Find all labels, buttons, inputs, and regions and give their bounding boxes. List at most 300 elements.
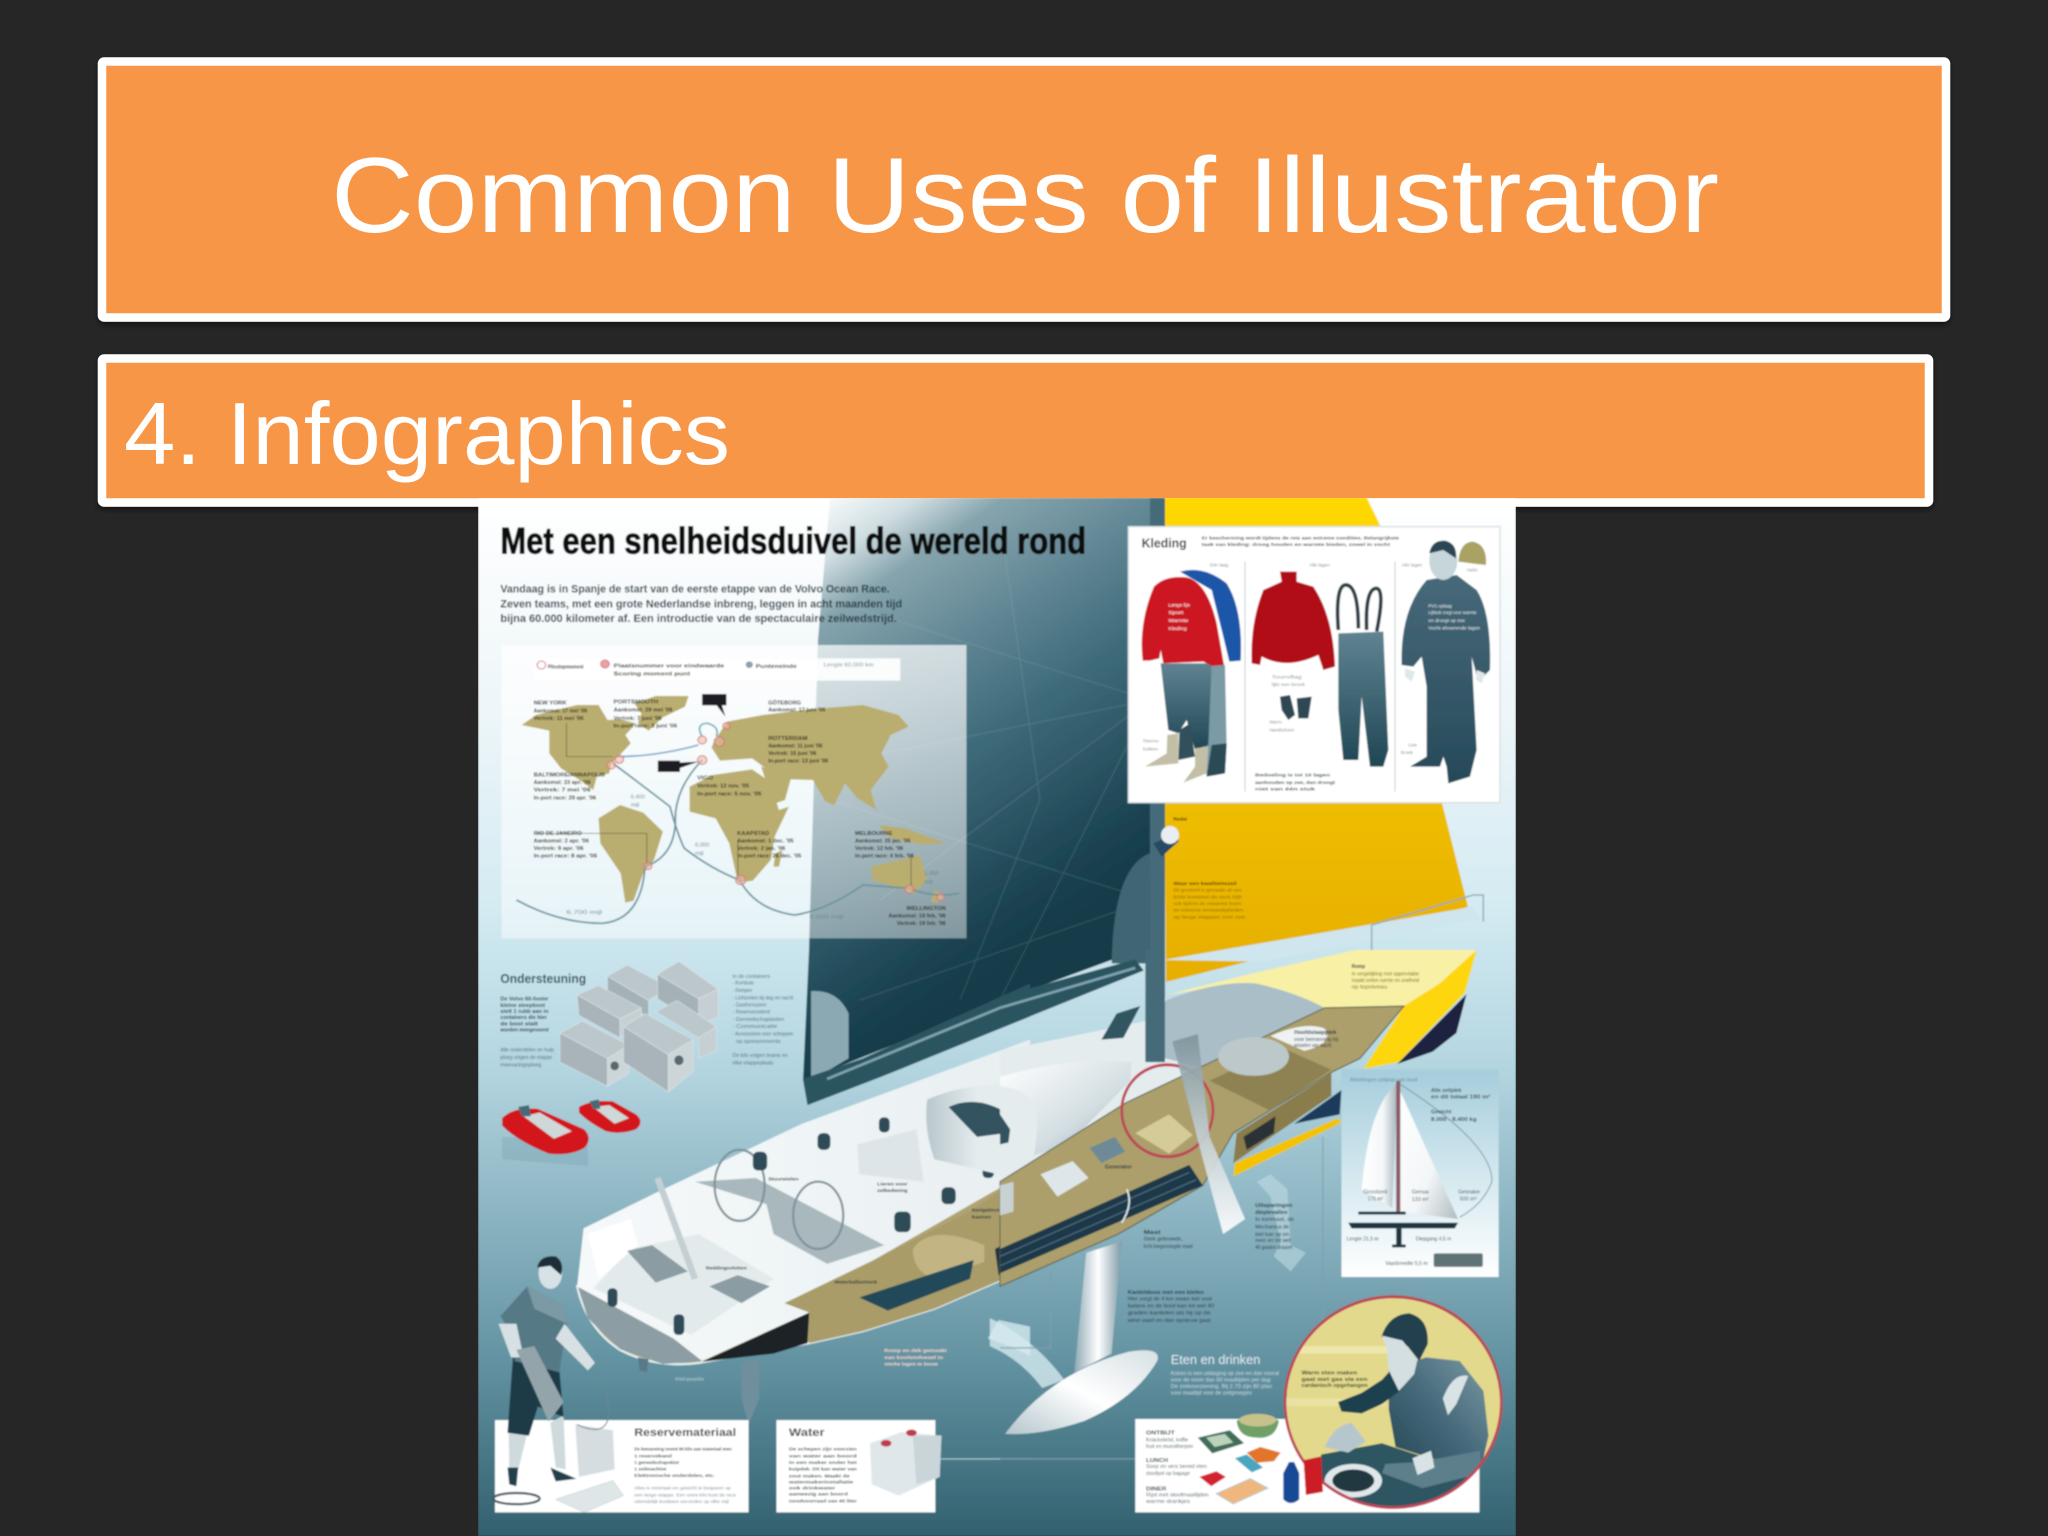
boom (803, 984, 1030, 1105)
lower-right region drawn at zoom scale (990, 950, 1501, 1512)
food intro: Koken is een uitdaging op zee en dan vooral (1171, 1371, 1279, 1377)
water text: zout maken. Maakt de (789, 1473, 850, 1479)
map city labels: WELLINGTON (906, 906, 946, 912)
clothing panel region drawn at zoom scale (1112, 527, 1500, 963)
inset labels: Gennaker (1458, 1189, 1480, 1196)
hatch (1101, 1006, 1140, 1040)
bus icon (1434, 1253, 1483, 1267)
boat notes: neer en tot wel (1255, 1238, 1291, 1244)
radar dome (1153, 817, 1188, 857)
spare materials text: een lange etappe. Een extra kilo kost de race (634, 1492, 736, 1498)
deck labels: Waterballasttank (834, 1279, 878, 1285)
meal labels: fruit en muesliherpen (1146, 1444, 1194, 1450)
connector lines (1000, 1137, 1323, 1459)
hull dark bunks (1000, 1165, 1203, 1273)
deck labels: Lieren voor (877, 1181, 908, 1187)
boat notes: voor bemanning bij (1294, 1037, 1338, 1043)
khaki interior (1000, 1006, 1404, 1286)
big curved arrow head (988, 1320, 1030, 1355)
mast top (1396, 1081, 1400, 1212)
clothing caption: niet van één stuk (1255, 787, 1315, 793)
support list: - Rompen (732, 988, 752, 994)
khaki hull interior (784, 1170, 1030, 1343)
route distance notes: mijl (631, 803, 639, 809)
mast base (1145, 950, 1165, 1062)
inset labels: 175 m² (1368, 1196, 1383, 1202)
forward compartment disk (1210, 1026, 1331, 1111)
mainsail (1362, 1083, 1397, 1208)
water text: ook drinkwater (789, 1486, 836, 1492)
stern side panel (588, 1219, 638, 1279)
map city labels: Aankomst: 29 mei '06 (614, 708, 673, 714)
map city labels: In-port race: 13 juni '06 (768, 759, 829, 765)
map legend: Pitsstopmoment (548, 664, 584, 670)
curved arrow body (990, 1318, 1064, 1388)
map city labels: In-port race: 5 nov. '05 (697, 792, 762, 798)
map city labels: Vertrek: 12 feb. '06 (855, 846, 904, 852)
food intro: De zeilvoorziening. Bij 2.70 zijn 80 plan (1171, 1384, 1272, 1390)
cabin top (1000, 1061, 1132, 1156)
mast-side arch (1112, 853, 1151, 963)
spare materials text (634, 1447, 736, 1505)
support list: - Accessoires voor schoppen (732, 1031, 793, 1038)
support text: De Volvo 60-footer (500, 996, 549, 1002)
layer labels (1210, 563, 1478, 573)
map city labels: In-port race: 8 apr. '06 (534, 854, 598, 860)
portrait caption (1302, 1370, 1367, 1389)
boat notes: 40 graden draaien (1255, 1245, 1293, 1251)
inset labels: Grootzeil (1363, 1189, 1387, 1196)
spare materials text: Alles is minimaal om gewicht te besparen op (634, 1486, 731, 1492)
interior dark panels (859, 1230, 1030, 1311)
boat notes: graden kantelen als hij op de (1128, 1310, 1211, 1316)
survival suit figure: Lies (1408, 743, 1418, 748)
intro paragraph: bijna 60.000 kilometer af. Een introductie van de spectaculaire zeilwedstrijd. (500, 613, 897, 625)
route distance notes: 5.500 mijl (809, 914, 843, 920)
rail outline (1372, 895, 1483, 953)
map city labels: Vertrek: 7 mei '06 (534, 788, 592, 794)
map city labels: Aankomst: 25 jan. '06 (855, 838, 911, 844)
equipment boxes (1000, 1114, 1193, 1215)
clothing caption: Handschoen (1269, 728, 1295, 733)
clothing intro: taak van kleding: droog houden en warmte bieden, zowel in vocht (1202, 542, 1390, 548)
water text: noodvoorraad van 40 liter (789, 1498, 857, 1504)
survival suit figure: en droogt op zee (1428, 618, 1466, 623)
helm wheels (715, 1150, 843, 1249)
map city labels: Vertrek: 12 nov. '05 (697, 784, 750, 790)
black hull section (702, 1312, 809, 1362)
deck labels: kamer (972, 1214, 992, 1220)
map legend: Lengte 60.000 km (824, 663, 874, 669)
food bowl (1237, 1414, 1279, 1438)
food packets (1198, 1430, 1281, 1504)
clothing caption: Bedoeling is tot 10 lagen (1255, 773, 1330, 779)
water text: van water aan boord (789, 1453, 857, 1460)
base layer: shirts and legs: Sport (1168, 610, 1184, 615)
survival suit figure: Vocht afvoerende lagen (1428, 625, 1481, 630)
support text: kleine sleepboot (500, 1003, 545, 1009)
support list: - Gereedschapkisten (732, 1017, 784, 1023)
helmet (1458, 542, 1486, 565)
base layer: shirts and legs: Warmte (1168, 618, 1189, 623)
poster background (478, 498, 1516, 1536)
water text: De schepen zijn voorzien (789, 1447, 857, 1453)
yellow sail (1162, 498, 1468, 982)
support text: de boot stalt (500, 1021, 538, 1028)
inset labels: 133 m² (1412, 1197, 1429, 1203)
base layer: shirts and legs: Lange lijn (1168, 603, 1190, 608)
spare materials text: 1 reserveband (634, 1453, 672, 1460)
red highlight circle (1122, 1065, 1213, 1157)
support text (499, 996, 554, 1069)
boat notes: Mast (1144, 1230, 1161, 1236)
inset labels: Afmetingen zeilplan van boot (1350, 1077, 1418, 1084)
white deck (577, 1040, 1030, 1361)
title banner (102, 62, 1946, 318)
continents (522, 696, 947, 903)
support list: - Kombuis (732, 981, 754, 987)
inset labels: 8.000 - 8.400 kg (1431, 1117, 1477, 1123)
clothing heading: Kleding (1142, 536, 1187, 550)
boat notes: wind vaart en dan opnieuw gaat (1128, 1318, 1211, 1324)
trousers with braces (1338, 585, 1388, 767)
meal labels: Soep en vers bereid eten (1146, 1464, 1207, 1470)
food heading: Eten en drinken (1171, 1353, 1260, 1367)
map city labels: ROTTERDAM (768, 736, 808, 742)
support list: - Reserveonderd (732, 1009, 770, 1016)
sail note: ook tijdens de zwaarste buien (1173, 901, 1242, 906)
callout tags (658, 694, 726, 772)
sail note: en extreme omstandigheden (1173, 908, 1244, 913)
deck labels (675, 1176, 1013, 1383)
panel: sail plan inset (1341, 1070, 1499, 1277)
map city labels: MELBOURNE (855, 831, 893, 837)
support list: elke etappeplaats (732, 1060, 774, 1066)
deck labels: Stuurwielen (768, 1176, 799, 1183)
inset labels: Gewicht (1431, 1109, 1452, 1116)
map city labels: In-port race: 4 feb. '06 (855, 854, 915, 860)
red can overlap (1304, 1456, 1323, 1495)
map city labels: BALTIMORE/ANNAPOLIS (534, 773, 605, 779)
support text: stelt 1 rubb aan in (500, 1009, 549, 1015)
map city labels: Vertrek: 19 feb. '06 (897, 921, 946, 927)
inset labels: Diepgang 4,5 m (1416, 1237, 1451, 1243)
map city labels: RIO DE JANEIRO (534, 831, 582, 837)
map legend: Punteneinde (756, 664, 798, 670)
boat notes: Kanteldoos met een kielen (1128, 1290, 1204, 1296)
water text: kuipdek. Dit kan water van (789, 1466, 857, 1473)
rudder stub (741, 1359, 759, 1425)
crew member figure (499, 1256, 609, 1486)
side wall (857, 1129, 924, 1182)
carbon note: sterke lagen te bouw (884, 1361, 938, 1368)
map city labels: Vertrek: 7 juni '06 (614, 716, 663, 722)
boat notes (1105, 964, 1419, 1324)
spare materials text: 1 zeilmachine (634, 1466, 667, 1473)
boat notes: dieptevallen (1255, 1210, 1287, 1216)
layer labels: Alle lagen (1309, 563, 1330, 568)
clothing caption: aanhouden op zee, dan droogt (1255, 780, 1335, 786)
carbon note (884, 1348, 947, 1368)
map city labels: Vertrek: 2 jan. '06 (737, 846, 786, 852)
food intro (1171, 1371, 1279, 1397)
interior ring (913, 1235, 984, 1279)
fleece jacket (1251, 572, 1335, 670)
map city labels: Aankomst: 1 dec. '05 (737, 838, 794, 844)
map legend: Plaatsnummer voor eindwaarde (614, 663, 725, 669)
layer labels: Alle lagen (1402, 563, 1423, 568)
carbon note: van koolstofvezel in (884, 1355, 943, 1361)
map city labels: PORTSMOUTH (614, 699, 658, 705)
deck labels: Navigatiecentrum (972, 1207, 1013, 1214)
mast foot arch (811, 991, 849, 1081)
water text: watermakerinstallatie (788, 1480, 854, 1486)
boat notes: balans en de boot kan tot wel 40 (1128, 1303, 1214, 1310)
hull silhouette (1348, 1212, 1458, 1247)
boat notes: wisselen van wacht (1294, 1043, 1332, 1049)
support heading: Ondersteuning (500, 972, 586, 986)
sail note: Dit grootzeil is gemaakt uit een (1173, 888, 1242, 893)
route distance notes: 6.400 (631, 794, 645, 800)
side arrow (1257, 1174, 1306, 1271)
carbon note: Romp en dek gemaakt (884, 1348, 947, 1354)
clothing caption: Warm (1269, 719, 1282, 724)
boat notes: Mechanica de (1255, 1224, 1289, 1230)
support list: De kits volgen teams en (732, 1053, 788, 1059)
meal labels: stoofpot op bagage (1146, 1471, 1190, 1477)
drinks (1283, 1456, 1323, 1503)
portrait caption: gaat met gas via een (1302, 1377, 1367, 1383)
base layer: shirts and legs (1142, 570, 1241, 783)
lower-left region drawn at zoom scale (493, 961, 1030, 1512)
boat notes: Generator (1105, 1164, 1132, 1171)
support list: op sponsorevents (736, 1039, 781, 1045)
survival suit figure (1401, 541, 1490, 783)
meal labels: warme drankjes (1146, 1499, 1191, 1505)
deck labels: Kiel-positie (675, 1376, 704, 1383)
food intro: voor de meer dan 80 maaltijden per dag (1171, 1377, 1271, 1384)
winches (607, 1117, 994, 1335)
clothing caption (1255, 674, 1335, 793)
cabin hatch dark (1000, 1114, 1010, 1144)
spare materials text: uiteindelijk kostbare seconden op elke mijl (634, 1499, 729, 1505)
intro paragraph: Zeven teams, met een grote Nederlandse inbreng, leggen in acht maanden tijd (500, 599, 902, 610)
sail note: lichte kunststof die sterk blijft (1173, 894, 1242, 899)
daggerboard (1172, 1034, 1245, 1234)
map city labels: GÖTEBORG (768, 700, 801, 706)
map city labels: NEW YORK (534, 700, 568, 706)
cockpit sides (695, 1178, 884, 1264)
support text: containers die hier (500, 1015, 547, 1021)
black bow (1397, 994, 1467, 1064)
connector line to food panel (941, 1457, 1030, 1460)
boat notes: licht toegevoegde mast (1144, 1244, 1193, 1250)
meal labels: Rijst met stoofmaaltijden (1146, 1493, 1209, 1499)
water text (788, 1447, 857, 1504)
spare materials text: De bemanning neemt 80 kilo aan materiaal mee: (634, 1447, 733, 1453)
boat notes: Sterk gebouwde, (1144, 1237, 1183, 1243)
base layer: shirts and legs: Thermo (1143, 739, 1159, 744)
pale yellow bow deck (1166, 950, 1477, 1068)
subtitle text: 4. Infographics (124, 384, 730, 483)
route distance notes: 6.000 (695, 843, 709, 849)
spare materials heading: Reservemateriaal (634, 1427, 736, 1439)
rigid inflatable boats (502, 1099, 641, 1166)
circular portrait: crew eating (1284, 1297, 1501, 1511)
boat notes: In kielmast, de (1255, 1217, 1294, 1223)
grey stern (578, 1287, 702, 1364)
meal labels: Knäckebröd, koffie (1146, 1437, 1189, 1443)
boat notes: op topniveau (1352, 984, 1387, 991)
sail bags (627, 1245, 770, 1303)
survival suit figure: Lijfstuk zorgt voor warmte (1428, 610, 1477, 615)
spare materials illustration (493, 1425, 624, 1512)
water jerrycans (870, 1429, 941, 1496)
map legend (534, 658, 900, 681)
support text: meevaringsploeg (500, 1063, 542, 1069)
stern floor (593, 1234, 774, 1335)
bow section (1233, 1073, 1341, 1176)
inset labels (1347, 1077, 1491, 1267)
map city labels: Aankomst: 17 juni '06 (768, 708, 826, 714)
layer labels: Eén laag (1210, 563, 1229, 568)
map city labels: Aankomst: 17 mei '06 (534, 709, 588, 715)
race routes (516, 723, 959, 923)
clothing caption: Tourniflag (1272, 674, 1302, 679)
boom end (1000, 959, 1144, 1028)
harbour markers (607, 723, 944, 901)
boat notes: Hoofdslaapplek (1294, 1030, 1337, 1036)
inset labels: Alle zeilplek (1431, 1088, 1462, 1094)
map city labels (534, 699, 946, 927)
panel: spare materials (493, 1420, 749, 1512)
boat hull and deck (577, 1040, 1030, 1364)
map city labels: Aankomst: 19 feb. '06 (889, 914, 946, 920)
map legend: Scoring moment punt (614, 671, 690, 677)
layer labels: Helm (1467, 568, 1478, 573)
inset labels: Vaarbreedte 5,5 m (1385, 1261, 1428, 1267)
deck labels: Reddingsvlotten (706, 1265, 747, 1272)
sail note: Waar een kwaliteitszeil (1173, 881, 1237, 886)
radar dome: Radar (1173, 817, 1188, 823)
deck overlap (1000, 999, 1210, 1182)
poster headline: Met een snelheidsduivel de wereld rond (500, 521, 1086, 562)
support list (732, 974, 794, 1066)
support list: - Lichtzeilen bij dag en nacht (732, 995, 794, 1001)
map city labels: Vertrek: 15 juni '06 (768, 751, 817, 757)
inset labels: 500 m² (1460, 1196, 1477, 1202)
survival suit figure: PVC-oplaag (1428, 603, 1452, 608)
route distance notes (566, 794, 939, 920)
water heading: Water (789, 1427, 826, 1439)
bright yellow bow (1363, 950, 1477, 1069)
map city labels: In-port race: 26 dec. '05 (737, 854, 802, 860)
survival suit figure: Broek (1401, 750, 1413, 755)
pale strip under the sail (1163, 907, 1480, 962)
subtitle banner (102, 358, 1929, 502)
support containers (560, 961, 718, 1092)
infographic: sailing boat poster (478, 498, 1516, 1536)
panel: water (776, 1420, 941, 1512)
panel: clothing (1128, 527, 1500, 803)
panel: food (1135, 1414, 1479, 1512)
keel bulb (1005, 1350, 1158, 1434)
keel fin (1074, 1241, 1122, 1372)
support text: worden meegevoerd (499, 1027, 549, 1034)
upper-left region drawn at zoom scale (500, 521, 1086, 938)
clothing intro: Er bescherming wordt tijdens de reis aan extreme condities. Belangrijkste (1202, 535, 1399, 541)
sail seams (860, 603, 1127, 1000)
panel: route map (501, 645, 966, 938)
route distance notes: 6.700 mijl (566, 910, 602, 916)
support list: - Gasfornuizen (732, 1002, 767, 1008)
support list: In de containers (732, 974, 770, 980)
support list: - Communicatie (732, 1024, 777, 1030)
gloves (1280, 695, 1312, 720)
base layer: shirts and legs: Kleding (1168, 626, 1187, 631)
map city labels: Aankomst: 2 apr. '06 (534, 838, 590, 844)
portrait caption: Warm eten maken (1302, 1370, 1357, 1377)
map city labels: In-port race: 3 juni '06 (614, 723, 678, 729)
spare materials text: 1 gereedschapskist (634, 1460, 679, 1466)
boat notes: In vergelijking met oppervlakte (1352, 971, 1419, 978)
cabin block (926, 1084, 1030, 1182)
boat notes: Hier zorgt de 4 ton zware kiel voor (1128, 1296, 1213, 1303)
clothing dividers (1245, 562, 1395, 792)
clothing caption: lijkt een broek (1272, 682, 1306, 687)
boat notes: maakt zeilen ruimte en snelheid (1352, 978, 1419, 984)
boat notes: Uitsparingen (1255, 1203, 1292, 1209)
food intro: voor maaltijd voor de zeilgroepjes (1171, 1390, 1252, 1397)
water text: aanwezig aan boord (789, 1491, 848, 1498)
map city labels: Aankomst: 11 juni '06 (768, 743, 823, 749)
meal labels: LUNCH (1146, 1458, 1169, 1464)
inset labels: Genua (1412, 1189, 1429, 1196)
support text: ploeg volgen de etappe (500, 1055, 552, 1061)
spinnaker outline (1401, 1085, 1492, 1217)
meal labels: ONTBIJT (1146, 1430, 1175, 1437)
support text: Alle onderdelen en hulp (500, 1048, 554, 1054)
route distance notes: 1.450 (924, 871, 939, 877)
map city labels: Vertrek: 11 mei '06 (534, 716, 584, 722)
jib (1399, 1088, 1458, 1219)
map city labels: Aankomst: 23 apr. '06 (534, 780, 591, 786)
meal labels (1146, 1430, 1209, 1505)
spare materials text: Elektronische onderdelen, etc. (634, 1473, 715, 1479)
dark mainsail (803, 498, 1152, 1081)
title text: Common Uses of Illustrator (331, 135, 1719, 255)
water text: in een maker onder het (789, 1460, 857, 1466)
inset labels: Lengte 21,5 m (1347, 1237, 1379, 1243)
meal labels: DINER (1146, 1487, 1167, 1493)
route distance notes: mijl (695, 851, 704, 857)
route distance notes: mijl (924, 879, 933, 885)
intro paragraph (500, 584, 902, 625)
stern pole (657, 1178, 695, 1279)
mast (1150, 498, 1165, 1058)
map city labels: In-port race: 29 apr. '06 (534, 795, 597, 801)
map city labels: VIGO (697, 775, 714, 781)
clothing intro (1202, 535, 1399, 548)
inset labels: en dit totaal 190 m² (1431, 1095, 1491, 1101)
base layer: shirts and legs: Sokken (1143, 747, 1159, 752)
deck labels: zeilbediening (877, 1188, 908, 1194)
sail note (1173, 881, 1246, 919)
sail note: op lange etappes over zee (1173, 914, 1246, 919)
portrait caption: cardanisch opgehangen (1302, 1383, 1367, 1389)
boat notes: kiel kan op en (1255, 1232, 1289, 1238)
cabin roof (1145, 983, 1325, 1070)
